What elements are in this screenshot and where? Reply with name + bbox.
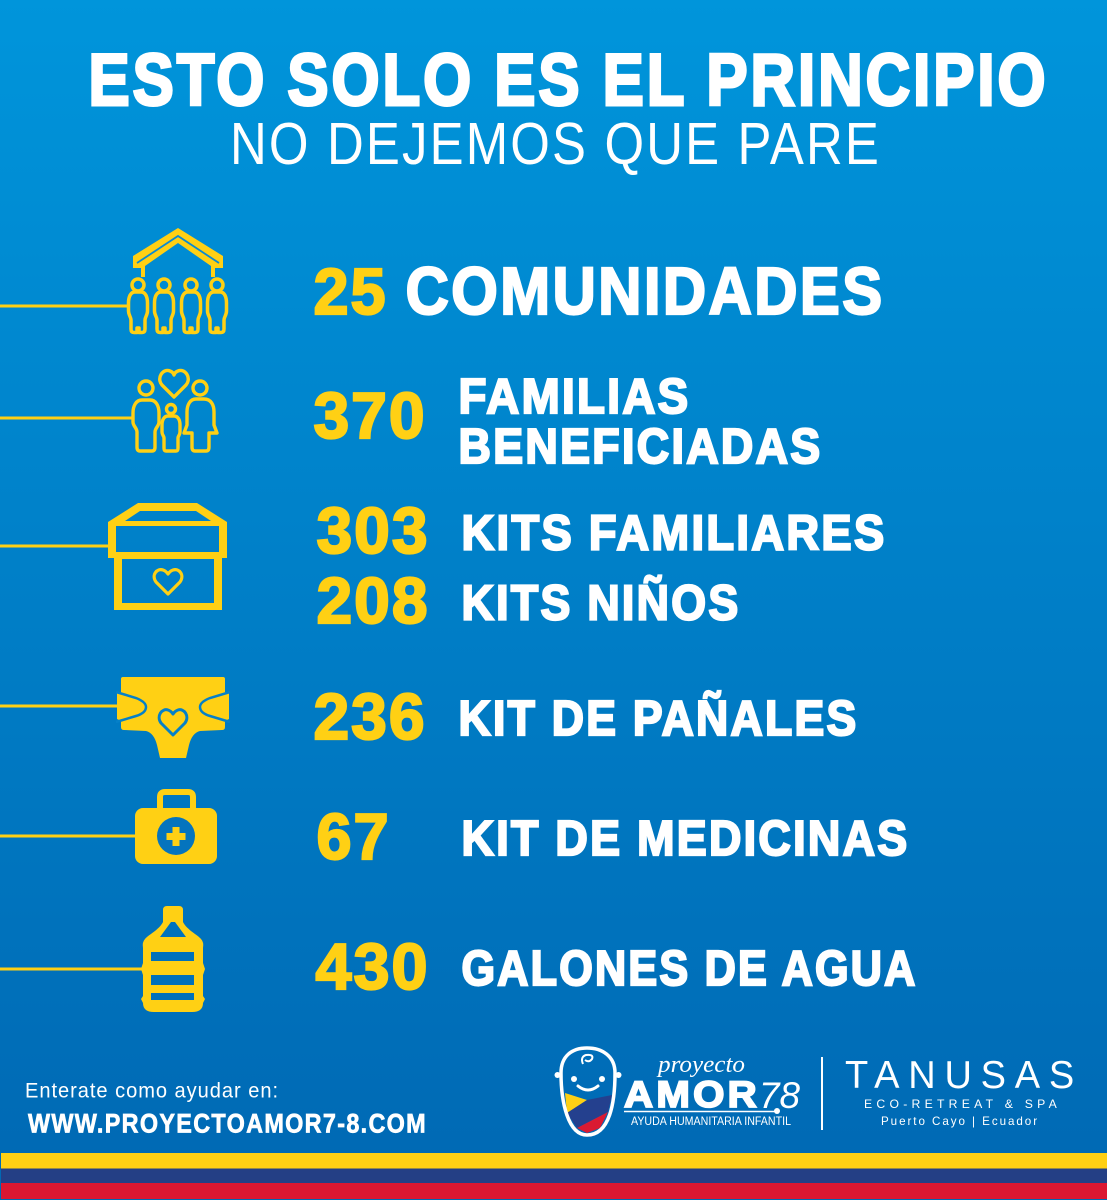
row: familias — [0, 370, 822, 474]
icon: community house — [0, 228, 226, 332]
value: 67: 67 — [316, 800, 390, 873]
logo: proyecto amor 7-8: AYUDA HUMANITARIA INFANTIL — [631, 1116, 792, 1128]
icon: water jug — [0, 906, 205, 1012]
icon: family with heart — [0, 370, 217, 451]
website call to action: WWW.PROYECTOAMOR7-8.COM — [28, 1108, 427, 1138]
row: medicinas — [0, 792, 910, 873]
title: NO DEJEMOS QUE PARE — [230, 111, 881, 177]
icon: diaper — [0, 677, 230, 758]
label: familias beneficiadas — [458, 370, 822, 474]
label: kits familiares: KITS FAMILIARES — [462, 506, 886, 560]
divider — [821, 1057, 823, 1130]
label: kit de panales: KIT DE PAÑALES — [458, 692, 858, 746]
label: familias beneficiadas: BENEFICIADAS — [458, 420, 822, 474]
logo: tanusas: ECO-RETREAT & SPA — [864, 1099, 1061, 1111]
value: 303: 303 — [316, 494, 430, 567]
website call to action — [25, 1080, 427, 1138]
row: agua — [0, 906, 918, 1012]
value: 236: 236 — [314, 680, 426, 753]
value: 208: 208 — [316, 564, 430, 637]
logo: proyecto amor 7-8: AMOR — [624, 1074, 760, 1115]
icon: medicine kit — [0, 792, 217, 864]
row: kits — [0, 494, 886, 637]
logo: proyecto amor 7-8 — [554, 1048, 800, 1135]
logo: proyecto amor 7-8: proyecto — [656, 1052, 745, 1078]
value: 25: 25 — [314, 255, 388, 328]
logo: proyecto amor 7-8: 78 — [759, 1075, 800, 1116]
label: comunidades: COMUNIDADES — [406, 254, 884, 329]
value: 370: 370 — [314, 379, 426, 452]
label: kit de medicinas: KIT DE MEDICINAS — [462, 812, 910, 866]
title — [88, 40, 1048, 177]
row: comunidades — [0, 228, 884, 332]
icon: box with heart — [0, 503, 227, 610]
icon: baby mascot — [554, 1048, 622, 1135]
flag stripes — [1, 1153, 1107, 1199]
logo: tanusas: Puerto Cayo | Ecuador — [881, 1114, 1039, 1128]
logo: tanusas — [845, 1054, 1083, 1128]
row: panales — [0, 677, 858, 758]
value: 430: 430 — [316, 930, 430, 1003]
logo: tanusas: TANUSAS — [845, 1054, 1083, 1097]
website call to action: Enterate como ayudar en: — [25, 1080, 279, 1102]
label: kits ninos: KITS NIÑOS — [462, 576, 740, 630]
label: galones de agua: GALONES DE AGUA — [462, 942, 918, 996]
label: familias beneficiadas: FAMILIAS — [458, 370, 690, 424]
